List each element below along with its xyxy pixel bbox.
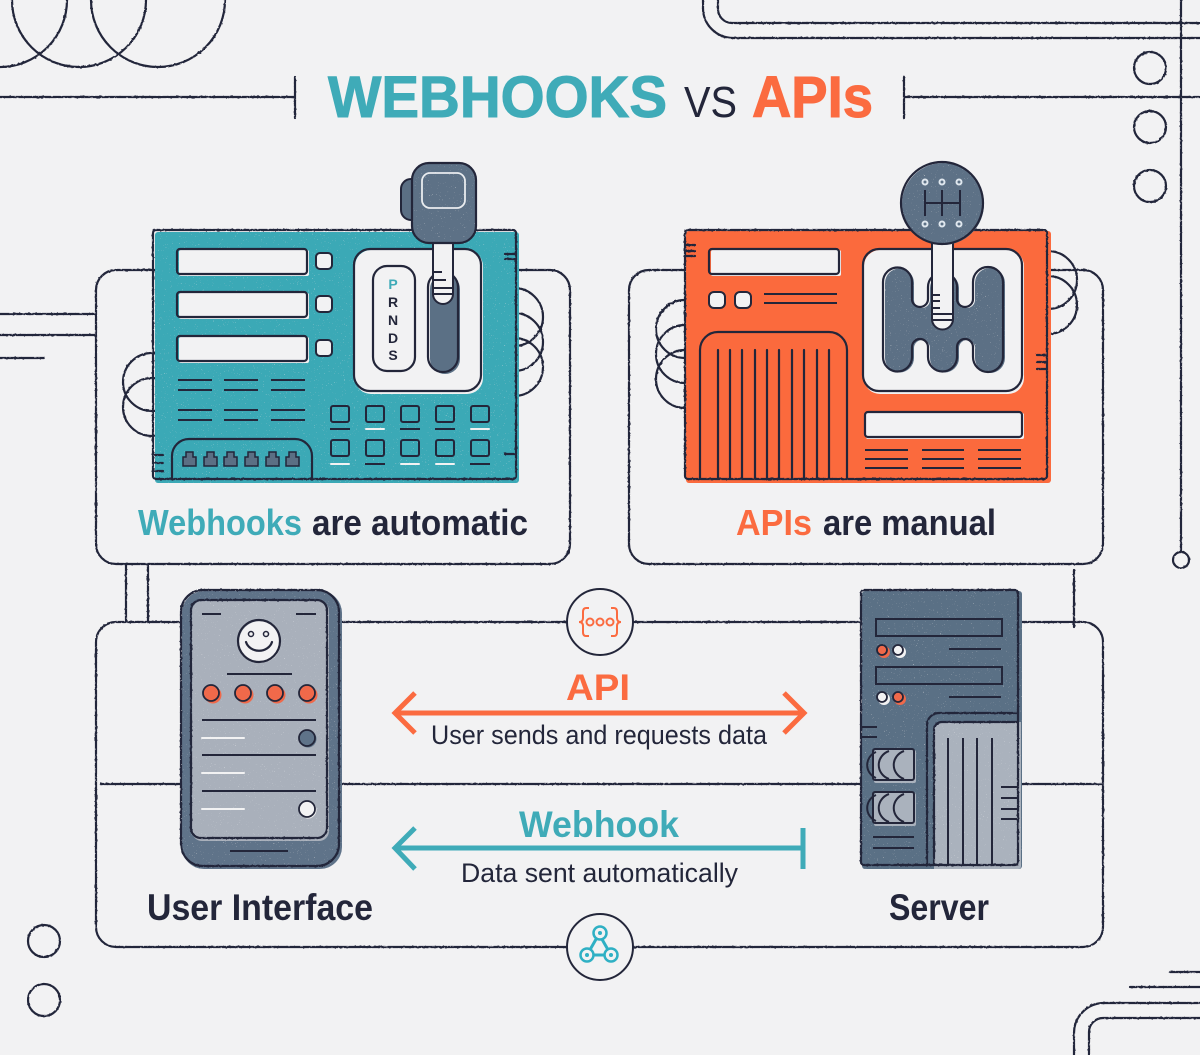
icon: api braces — [567, 589, 633, 655]
icon: webhook — [567, 914, 633, 980]
arrow: api two-way — [395, 693, 804, 733]
caption: are automatic — [312, 502, 528, 543]
arrow: webhook one-way — [395, 828, 803, 869]
gear stick and round knob — [901, 162, 984, 330]
panel: comparison frame — [96, 622, 1103, 947]
title: APIs — [752, 65, 873, 130]
screen lines — [202, 614, 316, 851]
title: WEBHOOKS — [328, 65, 667, 130]
caption: are manual — [823, 502, 996, 543]
text lines — [178, 380, 305, 420]
label: user interface: User Interface — [147, 887, 373, 928]
icon: smiley — [238, 620, 281, 663]
input fields — [177, 249, 332, 363]
api description: User sends and requests data — [431, 720, 768, 750]
drive bays — [861, 619, 1017, 865]
caption: Webhooks — [138, 502, 302, 543]
gear letters: R — [388, 294, 398, 310]
fans — [867, 749, 916, 826]
toggles — [299, 730, 316, 818]
shifter gate — [863, 249, 1024, 394]
input field and toggles — [709, 249, 841, 308]
gear letters: P — [388, 276, 398, 292]
webhook description: Data sent automatically — [461, 858, 738, 888]
automatic transmission console — [153, 163, 519, 483]
gear stick and key knob — [401, 163, 476, 304]
caption: APIs — [736, 502, 812, 543]
title: VS — [684, 78, 737, 127]
caption — [138, 502, 528, 543]
panel frame and loops — [96, 270, 570, 564]
device: server tower — [861, 590, 1022, 869]
port panel — [172, 439, 312, 478]
panel frame and loops — [629, 251, 1103, 564]
status lights — [877, 645, 906, 705]
gear letters: D — [388, 330, 398, 346]
gear letters — [388, 276, 398, 363]
vent grille — [700, 332, 847, 478]
webhook heading: Webhook — [519, 804, 679, 845]
caption — [736, 502, 996, 543]
panel: apis are manual — [629, 162, 1103, 564]
gear letters: N — [388, 312, 398, 328]
button grid — [330, 406, 490, 464]
gear letters: S — [388, 347, 398, 363]
api heading: API — [566, 667, 630, 708]
title — [328, 65, 873, 130]
manual transmission console — [685, 162, 1051, 483]
red buttons — [203, 685, 318, 704]
label: server: Server — [889, 887, 989, 928]
device: user interface phone — [181, 590, 342, 869]
shifter gate — [354, 249, 483, 394]
panel: webhooks are automatic — [96, 163, 570, 564]
lower field and text lines — [865, 412, 1024, 468]
